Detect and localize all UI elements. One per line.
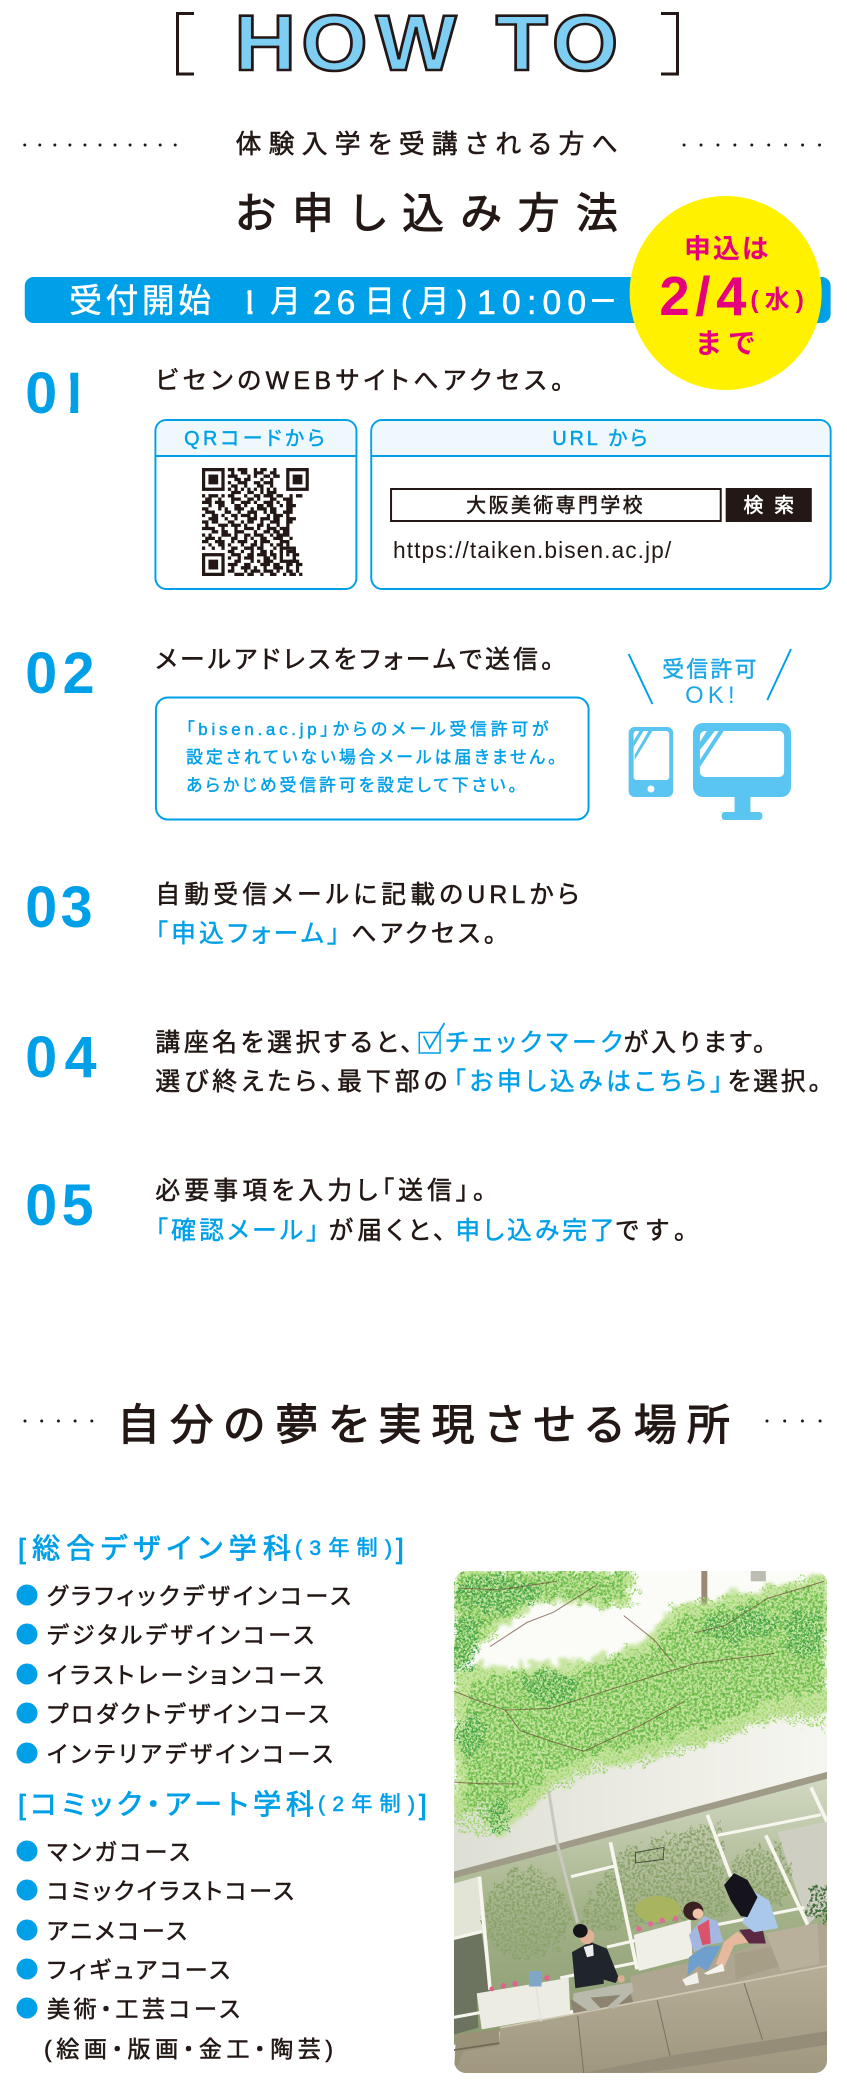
course list: プロダクトデザインコース <box>47 1701 329 1727</box>
person: man in black <box>572 1924 633 2011</box>
how-to steps section <box>25 130 831 1245</box>
step 04 line 1: チェックマーク <box>446 1029 623 1057</box>
course list: コミックイラストコース <box>47 1878 294 1904</box>
course list: アニメコース <box>47 1918 187 1944</box>
bar date: 26 <box>313 284 355 322</box>
callout: mail permission note: 設定されていない場合メールは届きません。 <box>186 748 556 767</box>
icon: smartphone <box>629 727 673 797</box>
step number 01 <box>28 372 78 414</box>
department heading: ] <box>396 1533 404 1564</box>
step 03 line 2: へアクセス。 <box>351 920 496 948</box>
left planter <box>477 1971 570 2029</box>
step 03 line 2 <box>155 920 496 948</box>
step 04 <box>25 1023 821 1096</box>
department heading: [コミック・アート学科 <box>18 1789 314 1820</box>
step 05 <box>25 1174 686 1245</box>
tree foliage <box>452 1571 827 1839</box>
panel: URL <box>371 420 831 589</box>
icon: right bracket <box>661 14 678 74</box>
course list <box>16 1583 351 1767</box>
title: HOW TO <box>178 0 678 87</box>
course list: マンガコース <box>47 1839 190 1865</box>
step number 01: 0 <box>25 362 57 426</box>
step 02 text: メールアドレスをフォームで送信。 <box>155 646 553 674</box>
icon: devices with OK message <box>629 649 791 820</box>
department list: general design <box>16 1533 404 1767</box>
reception start bar <box>25 277 831 323</box>
step 01 <box>25 362 831 589</box>
step 04 line 2: を選択。 <box>728 1068 821 1096</box>
department heading: [総合デザイン学科 <box>18 1533 291 1564</box>
step 04 line 2: 「お申し込みはこちら」 <box>453 1068 723 1096</box>
title text: HOWTO <box>234 0 618 87</box>
heading: application method: お申し込み方法 <box>236 190 618 237</box>
step 04 line 1: 講座名を選択すると、 <box>155 1029 413 1057</box>
QR heading: QRコードから <box>184 428 325 450</box>
search button <box>726 488 812 522</box>
person: girl in red jacket <box>682 1902 723 1986</box>
bar label: 受付開始 <box>69 282 211 319</box>
bar date <box>248 287 614 319</box>
step 05 line 2: です。 <box>616 1217 686 1245</box>
deadline badge <box>630 196 822 390</box>
course list: フィギュアコース <box>47 1957 230 1983</box>
OK label: OK! <box>685 682 735 709</box>
department heading: (2年制) <box>318 1793 415 1816</box>
panel: QR code <box>155 420 356 589</box>
course list: 美術・工芸コース <box>47 1996 240 2022</box>
step 05 line 2 <box>155 1217 686 1245</box>
QR code image <box>202 468 309 576</box>
course list: インテリアデザインコース <box>47 1741 333 1767</box>
permission label: 受信許可 <box>662 657 756 682</box>
right planter <box>634 1896 692 1971</box>
icon: left bracket <box>178 14 194 74</box>
bar date: 日 <box>364 284 395 319</box>
step number 02: 02 <box>25 642 95 706</box>
bar date: 月 <box>270 284 301 319</box>
course list: (絵画・版画・金工・陶芸) <box>44 2036 333 2062</box>
icon: monitor <box>693 723 791 820</box>
course list: イラストレーションコース <box>47 1662 324 1688</box>
step 05 line 1: 必要事項を入力し「送信」。 <box>155 1177 485 1205</box>
search button text: 検索 <box>743 494 794 517</box>
bar date: 1 <box>240 284 258 322</box>
URL heading: URL から <box>552 428 647 450</box>
step 02 <box>25 642 791 820</box>
yellow circle <box>630 196 822 390</box>
bar background <box>25 277 831 323</box>
course list <box>16 1839 333 2062</box>
bar date: (月) <box>401 284 467 319</box>
step 04 line 2 <box>155 1068 821 1096</box>
deadline date: 2/4 <box>659 265 747 327</box>
step 04 line 2: 選び終えたら、最下部の <box>155 1068 447 1096</box>
step 04 line 1: が入ります。 <box>624 1029 765 1057</box>
step number 05: 05 <box>25 1174 94 1238</box>
search field text: 大阪美術専門学校 <box>466 494 643 517</box>
department heading: ] <box>419 1789 427 1820</box>
department list: comic art <box>16 1789 427 2062</box>
step 04 line 1 <box>155 1023 765 1057</box>
step number 03: 03 <box>25 876 93 940</box>
step 03 line 1: 自動受信メールに記載のURLから <box>155 881 579 909</box>
photo: students on campus steps under trees <box>454 1571 827 2073</box>
step number 01: 1 <box>57 362 89 426</box>
step number 04: 04 <box>25 1026 97 1090</box>
callout: mail permission note: あらかじめ受信許可を設定して下さい。 <box>186 776 517 795</box>
deadline weekday: (水) <box>750 286 804 314</box>
deadline label: 申込は <box>684 234 768 264</box>
step 05 line 2: 申し込み完了 <box>455 1217 615 1245</box>
step 05 line 2: 「確認メール」 <box>155 1217 319 1245</box>
callout: mail permission note <box>156 698 589 820</box>
bar date: 10:00 <box>477 284 586 322</box>
search field <box>391 489 721 521</box>
URL text: https://taiken.bisen.ac.jp/ <box>393 537 672 563</box>
course list: グラフィックデザインコース <box>47 1583 351 1609</box>
deadline until: まで <box>696 328 755 359</box>
department heading: (3年制) <box>295 1537 392 1560</box>
step 05 line 2: が届くと、 <box>329 1217 446 1245</box>
callout: mail permission note: 「bisen.ac.jp」からのメール受信許可が <box>186 720 549 739</box>
icon: checkbox <box>419 1023 445 1053</box>
right-hand plant <box>804 1884 827 1926</box>
step 01 text: ビセンのWEBサイトへアクセス。 <box>155 367 563 395</box>
step 03 <box>25 876 579 948</box>
section heading: 自分の夢を実現させる場所 <box>117 1402 730 1450</box>
step 03 line 2: 「申込フォーム」 <box>155 920 340 948</box>
subtitle: 体験入学を受講される方へ <box>236 130 618 159</box>
person: girl with long hair <box>704 1873 778 1975</box>
course list: デジタルデザインコース <box>47 1622 314 1648</box>
